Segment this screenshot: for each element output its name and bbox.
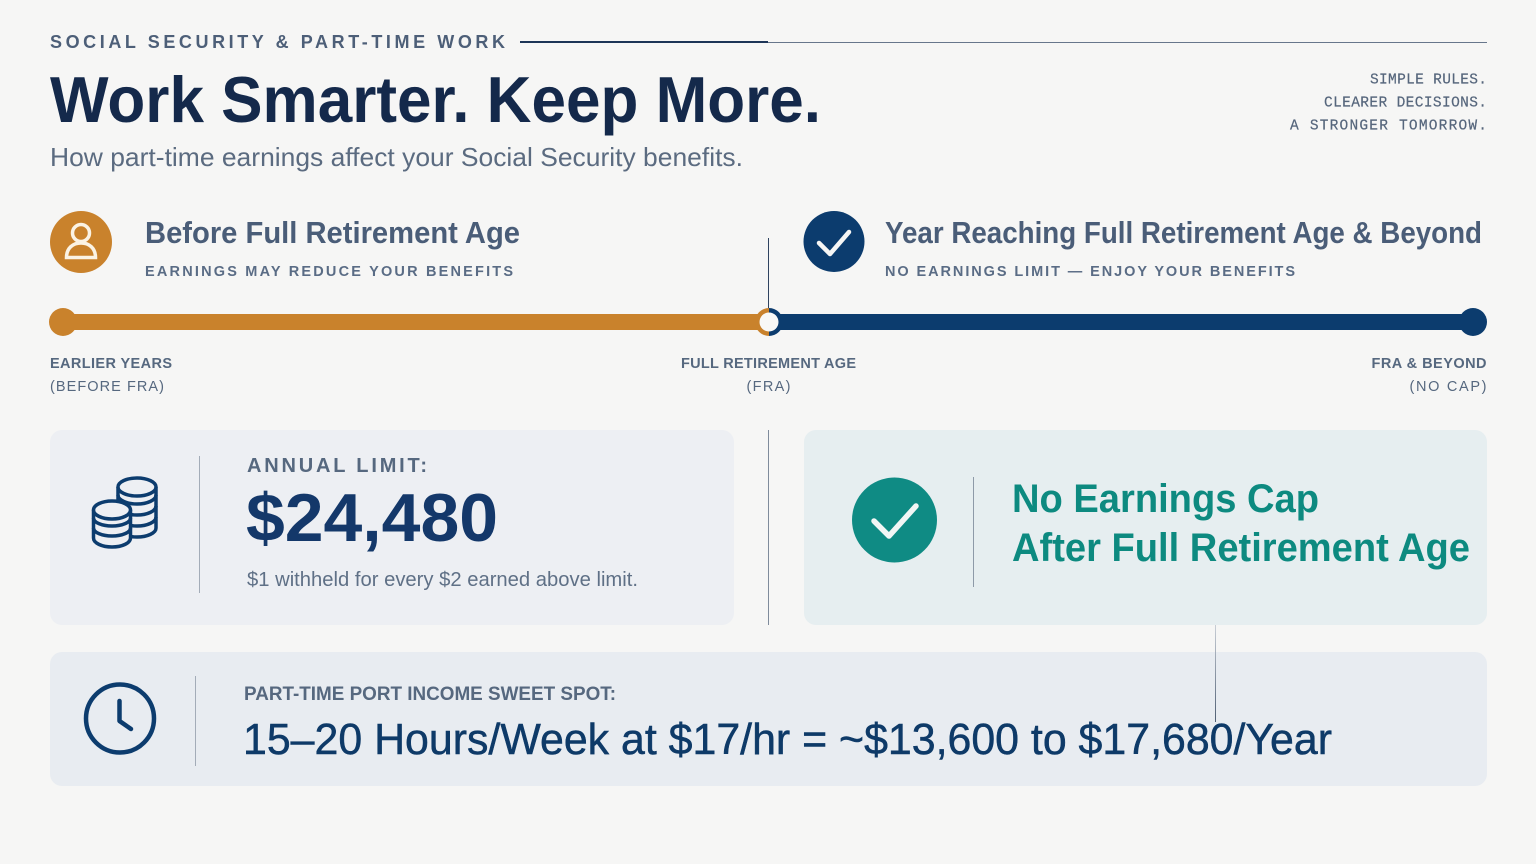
divider between panels [768, 430, 770, 625]
icon: check in navy circle [804, 211, 864, 272]
title: Work Smarter. Keep More. [50, 63, 821, 136]
icon: clock [86, 684, 154, 752]
tagline: A STRONGER TOMORROW. [1290, 118, 1487, 134]
icon: coin stacks [94, 478, 156, 547]
heading: year reaching full retirement age and beyond [885, 215, 1482, 280]
panel: part-time sweet spot [50, 652, 1487, 786]
timeline label: full retirement age [681, 356, 856, 395]
annual limit value: $24,480 [246, 480, 498, 556]
sweet spot label: PART-TIME PORT INCOME SWEET SPOT: [244, 684, 616, 705]
panel: no earnings cap [804, 430, 1487, 625]
heading: year reaching full retirement age and beyond: Year Reaching Full Retirement Age & Beyond [885, 215, 1482, 250]
heading: before full retirement age: EARNINGS MAY REDUCE YOUR BENEFITS [145, 264, 513, 280]
annual limit label: ANNUAL LIMIT: [247, 455, 427, 477]
tagline: CLEARER DECISIONS. [1324, 96, 1487, 112]
panel: annual limit [50, 430, 734, 625]
heading: before full retirement age: Before Full Retirement Age [145, 215, 520, 250]
no earnings cap statement [1012, 477, 1470, 570]
eyebrow header: SOCIAL SECURITY & PART-TIME WORK [50, 32, 505, 52]
subtitle: How part-time earnings affect your Social Security benefits. [50, 142, 743, 172]
sweet spot value: 15–20 Hours/Week at $17/hr = ~$13,600 to $17,680/Year [243, 715, 1332, 764]
icon: person in orange circle [50, 211, 112, 273]
timeline label: fra and beyond [1372, 356, 1486, 395]
timeline label: earlier years [50, 356, 172, 395]
timeline label: full retirement age: (FRA) [746, 379, 790, 395]
timeline label: full retirement age: FULL RETIREMENT AGE [681, 356, 856, 372]
timeline [49, 238, 1487, 336]
heading: year reaching full retirement age and beyond: NO EARNINGS LIMIT — ENJOY YOUR BENEFITS [885, 264, 1295, 280]
annual limit note: $1 withheld for every $2 earned above limit. [247, 569, 638, 591]
timeline label: fra and beyond: (NO CAP) [1410, 379, 1486, 395]
no earnings cap statement: After Full Retirement Age [1012, 526, 1470, 570]
heading: before full retirement age [145, 215, 520, 280]
no earnings cap statement: No Earnings Cap [1012, 477, 1319, 521]
tagline [1290, 72, 1487, 134]
timeline label: earlier years: (BEFORE FRA) [50, 379, 164, 395]
timeline label: fra and beyond: FRA & BEYOND [1372, 356, 1486, 372]
icon: teal check [852, 478, 937, 562]
tagline: SIMPLE RULES. [1370, 72, 1487, 88]
timeline label: earlier years: EARLIER YEARS [50, 356, 172, 372]
